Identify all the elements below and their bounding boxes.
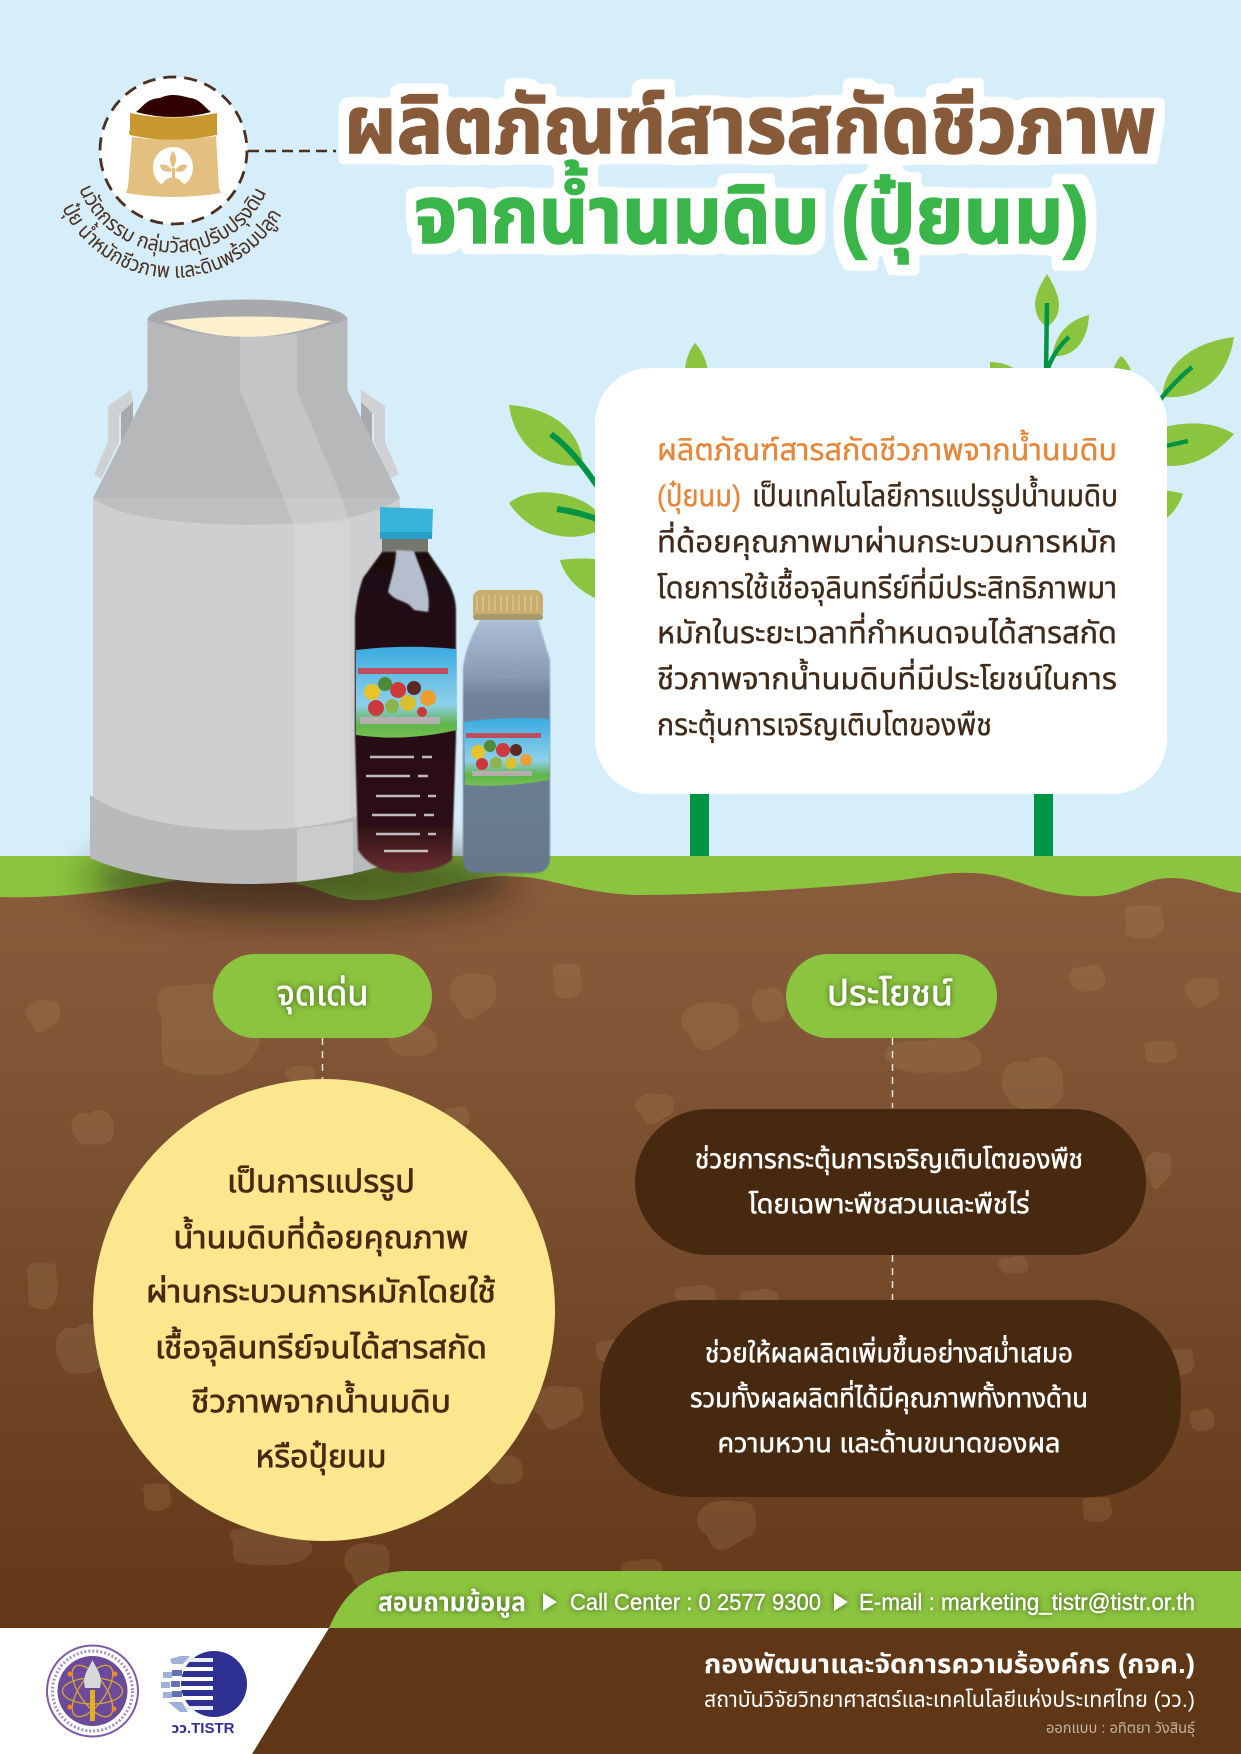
heading pill: benefits — [786, 954, 997, 1038]
can neck and shoulder — [93, 320, 400, 498]
badge: fertilizer sack: ปุ๋ย น้ำหมักชีวภาพ และดินพร้อมปลูก — [60, 202, 281, 278]
bottle cap — [380, 507, 433, 538]
footer organisation text — [704, 1649, 1195, 1737]
contact bar: E-mail : marketing_tistr@tistr.or.th — [859, 1589, 1195, 1615]
sky background — [0, 0, 1241, 860]
plants behind panel — [509, 274, 1234, 860]
can handles — [94, 390, 399, 479]
footer white logo area — [0, 1628, 329, 1754]
benefit pill 2: ช่วยให้ผลผลิตเพิ่มขึ้นอย่างสม่ำเสมอ — [705, 1335, 1073, 1368]
logo: TISTR: วว.TISTR — [172, 1721, 235, 1737]
bottle cap — [473, 590, 543, 620]
bottle body — [355, 552, 456, 873]
heading pill: benefits: ประโยชน์ — [827, 974, 953, 1013]
benefit pill 1: โดยเฉพาะพืชสวนและพืชไร่ — [748, 1189, 1030, 1219]
description text: โดยการใช้เชื้อจุลินทรีย์ที่มีประสิทธิภาพมา — [657, 567, 1117, 606]
bottle ribs — [366, 757, 446, 851]
description text — [657, 429, 1118, 743]
can dome — [93, 498, 400, 525]
embossed mark — [490, 663, 522, 677]
contact bar — [329, 1571, 1241, 1628]
milk surface — [164, 316, 331, 337]
yellow circle: highlight text: เป็นการแปรรูป — [227, 1164, 415, 1200]
sack icon — [126, 95, 221, 197]
bottle: grey fertilizer — [463, 590, 551, 873]
description text: กระตุ้นการเจริญเติบโตของพืช — [657, 709, 992, 743]
title line 2: จากน้ำนมดิบ (ปุ๋ยนม) — [414, 160, 1089, 264]
dashed connector — [248, 150, 336, 152]
heading pill: highlights — [213, 954, 432, 1038]
bottle label — [463, 716, 551, 788]
bottle: dark fertilizer — [355, 507, 458, 873]
footer organisation text: กองพัฒนาและจัดการความร้องค์กร (กจค.) — [704, 1649, 1195, 1679]
panel: description — [595, 368, 1167, 794]
yellow circle: highlight text: น้ำนมดิบที่ด้อยคุณภาพ — [174, 1216, 468, 1256]
curved caption: นวัตกรรม กลุ่มวัสดุปรับปรุงดิน — [80, 186, 266, 256]
yellow circle: highlight text: ชีวภาพจากน้ำนมดิบ — [191, 1380, 451, 1419]
benefit pill 2: ความหวาน และด้านขนาดของผล — [718, 1428, 1060, 1458]
yellow circle: highlight text: เชื้อจุลินทรีย์จนได้สารสกัด — [155, 1326, 487, 1366]
description text: หมักในระยะเวลาที่กำหนดจนได้สารสกัด — [657, 612, 1117, 650]
can body — [93, 498, 400, 840]
benefit pill 1: ช่วยการกระตุ้นการเจริญเติบโตของพืช — [695, 1144, 1083, 1175]
footer organisation text: สถาบันวิจัยวิทยาศาสตร์และเทคโนโลยีแห่งประเทศไทย (วว.) — [704, 1687, 1195, 1712]
connector lines — [322, 1038, 892, 1300]
description text: (ปุ๋ยนม) — [657, 480, 741, 514]
title — [344, 81, 1156, 264]
can base — [90, 795, 404, 884]
contact bar: สอบถามข้อมูล — [378, 1587, 526, 1618]
title line 1: ผลิตภัณฑ์สารสกัดชีวภาพ — [344, 81, 1156, 170]
dashed circle — [100, 77, 247, 224]
shadow under milk can — [85, 844, 515, 916]
bottle label — [355, 644, 458, 742]
description text: ผลิตภัณฑ์สารสกัดชีวภาพจากน้ำนมดิบ — [657, 429, 1117, 467]
description text: เป็นเทคโนโลยีการแปรรูปน้ำนมดิบ — [752, 475, 1118, 514]
footer organisation text: ออกแบบ : อทิตยา วังสินธุ์ — [1046, 1720, 1195, 1737]
logo: TISTR — [161, 1651, 247, 1737]
benefit pill 2 — [600, 1300, 1181, 1497]
description text: ชีวภาพจากน้ำนมดิบที่มีประโยชน์ในการ — [657, 658, 1117, 696]
bottle neck — [382, 539, 428, 553]
bottle body — [463, 620, 550, 873]
soil blotches — [26, 905, 1219, 1588]
yellow circle: highlight text — [93, 1079, 555, 1541]
badge: fertilizer sack — [60, 76, 336, 278]
can rim — [148, 300, 348, 340]
bottle highlight — [388, 550, 429, 612]
benefit pill 1 — [635, 1109, 1146, 1255]
logo: ministry seal — [47, 1646, 138, 1736]
heading pill: highlights: จุดเด่น — [276, 974, 368, 1014]
benefit pill 2: รวมทั้งผลผลิตที่ได้มีคุณภาพทั้งทางด้าน — [690, 1380, 1088, 1414]
soil ground — [0, 873, 1241, 1754]
description text: ที่ด้อยคุณภาพมาผ่านกระบวนการหมัก — [657, 521, 1117, 560]
yellow circle: highlight text: หรือปุ๋ยนม — [256, 1439, 386, 1475]
grass strip — [0, 856, 1241, 916]
footer dark band — [0, 1628, 1241, 1754]
yellow circle: highlight text: ผ่านกระบวนการหมักโดยใช้ — [146, 1274, 496, 1309]
milk can — [90, 300, 404, 884]
contact bar: Call Center : 0 2577 9300 — [570, 1589, 821, 1615]
